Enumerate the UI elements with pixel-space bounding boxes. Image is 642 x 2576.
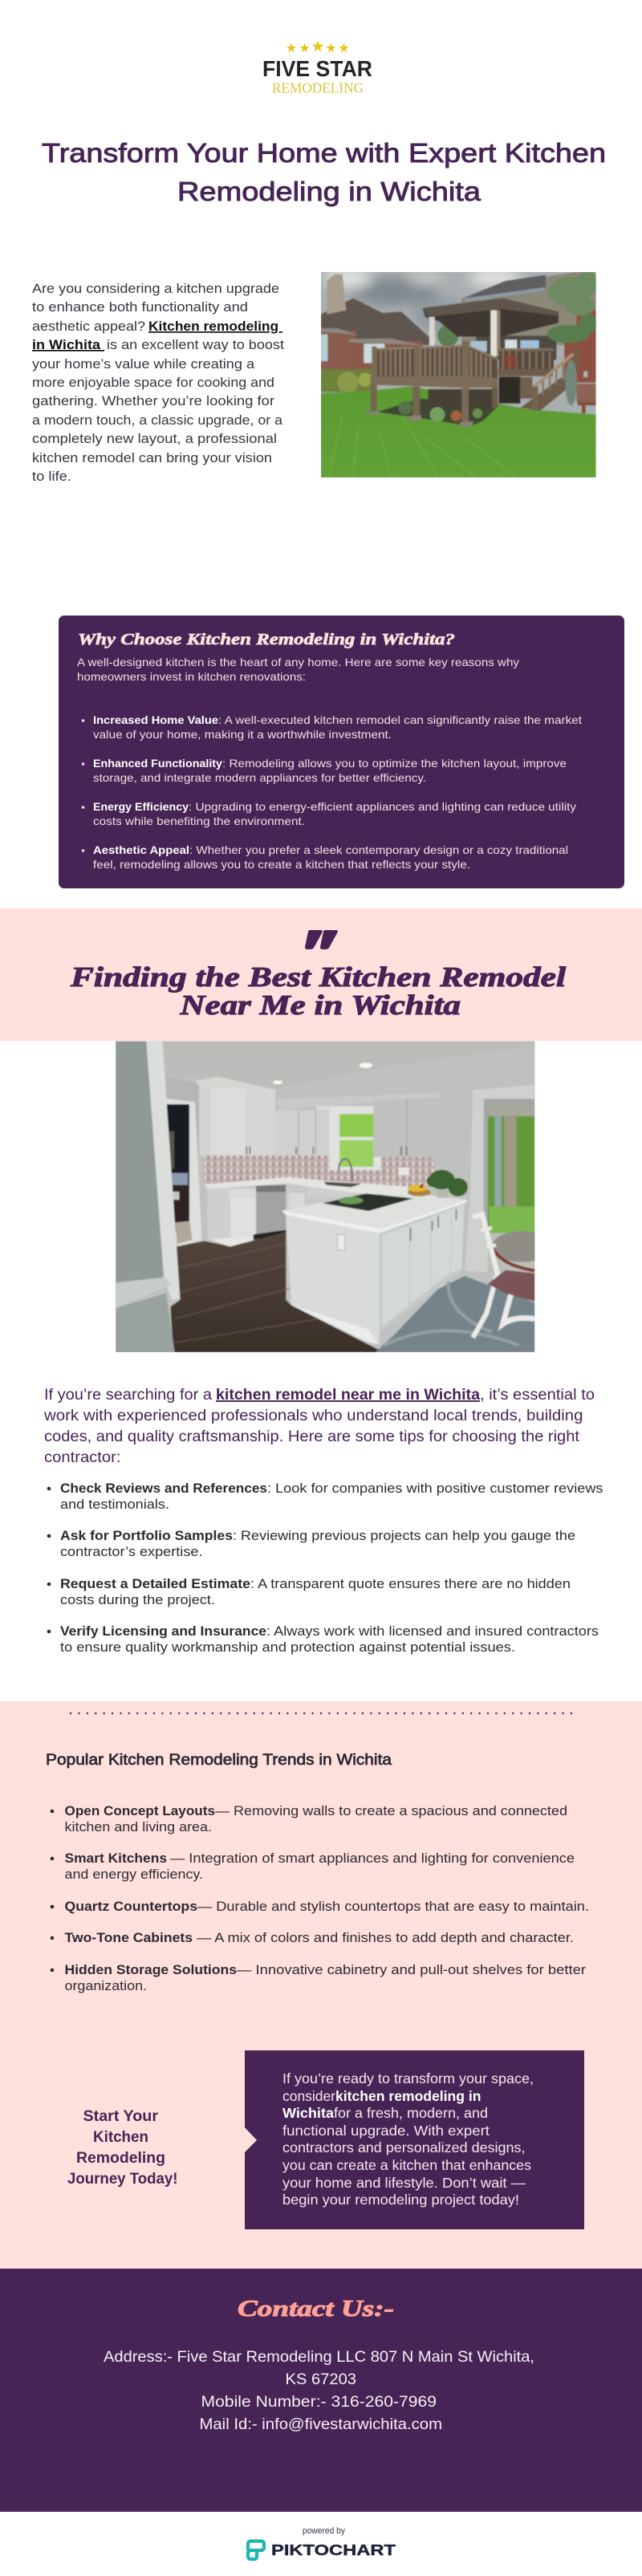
tree right [548, 271, 598, 315]
tip: licensing and insurance: Verify Licensing and Insurance [60, 1624, 266, 1639]
text block: introduction: is an excellent way to boost [107, 337, 284, 352]
logo wordmark: FIVE STAR [262, 56, 372, 81]
tip: detailed estimate: Request a Detailed Estimate [60, 1577, 250, 1591]
callout text: functional upgrade. With expert [282, 2123, 490, 2139]
trend: open concept: — Removing walls to create a spacious and connected [215, 1804, 567, 1818]
banner heading: Finding the Best Kitchen Remodel [70, 961, 566, 993]
callout text: Wichita [282, 2105, 334, 2121]
contact details: Mobile Number:- 316-260-7969 [201, 2393, 437, 2411]
panel: why choose kitchen remodeling [59, 616, 624, 888]
trend: quartz countertops: — Durable and stylish countertops that are easy to maintain. [197, 1899, 589, 1914]
bullet: energy efficiency [82, 800, 576, 827]
bullet: aesthetic appeal: : Whether you prefer a sleek contemporary design or a cozy traditional [189, 843, 568, 856]
peninsula [286, 1214, 380, 1344]
trend: two-tone cabinets: — A mix of colors and finishes to add depth and character. [197, 1931, 574, 1945]
panel heading: Why Choose Kitchen Remodeling in Wichita? [78, 631, 455, 648]
heading: start your kitchen remodeling journey [67, 2107, 178, 2188]
callout text: consider [282, 2088, 335, 2104]
trend: hidden storage [51, 1963, 587, 1993]
callout text: contractors and personalized designs, [282, 2139, 525, 2155]
tip: check reviews: : Look for companies with positive customer reviews [267, 1481, 603, 1496]
panel: contact us [0, 2269, 642, 2512]
trend: smart kitchens: and energy efficiency. [64, 1867, 203, 1882]
trend: hidden storage: — Innovative cabinetry and pull-out shelves for better [237, 1963, 587, 1977]
upper deck rail [498, 368, 553, 376]
doorway [164, 1098, 201, 1246]
lower cabinets [207, 1188, 256, 1238]
pergola [422, 308, 559, 337]
trend: smart kitchens [51, 1851, 575, 1882]
lawn [321, 387, 596, 477]
heading: start your kitchen remodeling journey: Remodeling [76, 2149, 165, 2167]
list: tips for choosing a contractor [47, 1481, 603, 1655]
logo: Five Star Remodeling [262, 40, 372, 96]
bullet: energy efficiency: : Upgrading to energy-efficient appliances and lighting can reduce utility [189, 800, 576, 813]
door trim and left wall [146, 1041, 180, 1300]
text block: searching for a kitchen remodel: codes, and quality craftsmanship. Here are some tips for choosing the right [44, 1428, 580, 1445]
trend: two-tone cabinets: Two-Tone Cabinets [64, 1931, 193, 1945]
text block: introduction: aesthetic appeal? [32, 319, 145, 334]
garden under deck [377, 399, 498, 427]
text block: introduction: more enjoyable space for cooking and [32, 375, 274, 390]
text block: introduction: your home’s value while creating a [32, 356, 255, 372]
window [315, 1106, 329, 1111]
text block: introduction: gathering. Whether you’re looking for [32, 393, 274, 408]
back counter [205, 1177, 408, 1196]
tip: check reviews: Check Reviews and References [60, 1481, 267, 1496]
staircase [499, 376, 520, 404]
heading: start your kitchen remodeling journey: Kitchen [93, 2128, 148, 2146]
callout text: your home and lifestyle. Don’t wait — [282, 2175, 526, 2191]
footer: powered by Piktochart: powered by [303, 2526, 345, 2536]
trend: smart kitchens: Smart Kitchens [64, 1851, 167, 1866]
tip: licensing and insurance: : Always work with licensed and insured contractors [266, 1624, 599, 1639]
callout text [282, 2070, 534, 2208]
trend: open concept [51, 1804, 567, 1834]
bullet: increased home value: : A well-executed kitchen remodel can significantly raise the market [218, 713, 582, 726]
bullet: increased home value: Increased Home Value [93, 713, 218, 726]
tip: licensing and insurance: to ensure quality workmanship and protection against potential issues. [60, 1640, 515, 1655]
sky clouds [323, 267, 522, 331]
footer: powered by Piktochart [248, 2526, 396, 2559]
bullet: aesthetic appeal: Aesthetic Appeal [93, 843, 189, 856]
trend: hidden storage: organization. [64, 1979, 147, 1993]
tip: portfolio samples: contractor’s expertise. [60, 1545, 202, 1559]
title: Remodeling in Wichita [177, 177, 481, 207]
deck posts [371, 384, 377, 412]
left house [321, 299, 436, 345]
callout text: for a fresh, modern, and [334, 2105, 488, 2121]
bullet: energy efficiency: costs while benefiting the environment. [93, 815, 305, 827]
cooktop [323, 1193, 413, 1211]
bullet: aesthetic appeal: feel, remodeling allows you to create a kitchen that reflects your style. [93, 858, 470, 871]
bullet: enhanced functionality [82, 757, 567, 784]
panel: finding the best kitchen remodel banner [0, 908, 642, 1041]
heading: start your kitchen remodeling journey: Journey Today! [67, 2170, 178, 2188]
text block: introduction: a modern touch, a classic upgrade, or a [32, 412, 283, 428]
Piktochart wordmark: PIKTOCHART [271, 2541, 396, 2558]
faucet [339, 1159, 352, 1181]
floor [171, 1232, 384, 1352]
upper cabinets [199, 1087, 249, 1156]
deck railing infill [373, 345, 498, 379]
text block: introduction: completely new layout, a professional [32, 431, 277, 446]
rug [376, 1276, 534, 1352]
backsplash [203, 1156, 329, 1184]
photo: house with wooden deck and lawn [320, 267, 598, 477]
tree behind [437, 325, 459, 347]
plant and fruit bowl [408, 1188, 431, 1197]
contact details [104, 2348, 534, 2433]
icon: five gold stars [286, 40, 349, 52]
trend: hidden storage: Hidden Storage Solutions [64, 1963, 237, 1977]
trend: open concept: Open Concept Layouts [64, 1804, 215, 1818]
text block: introduction: Are you considering a kitchen upgrade [32, 281, 279, 296]
callout text: you can create a kitchen that enhances [282, 2157, 531, 2173]
tip: check reviews [47, 1481, 603, 1512]
bullet: increased home value: value of your home, making it a worthwhile investment. [93, 728, 392, 741]
text block: introduction: to life. [32, 469, 71, 484]
trend: smart kitchens: — Integration of smart appliances and lighting for convenience [170, 1851, 575, 1866]
text block: searching for a kitchen remodel: , it’s essential to [480, 1387, 595, 1404]
text block: introduction: Kitchen remodeling [148, 319, 282, 334]
icon: quotation mark [305, 930, 338, 949]
text block: introduction [32, 281, 284, 484]
tip: detailed estimate: costs during the project. [60, 1593, 215, 1607]
banner heading [70, 961, 566, 1021]
table and chair [492, 1231, 551, 1262]
contact details: Address:- Five Star Remodeling LLC 807 N Main St Wichita, [104, 2348, 534, 2366]
contact details: KS 67203 [286, 2371, 356, 2388]
contact details: Mail Id:- info@fivestarwichita.com [199, 2416, 442, 2433]
panel: pink trends background [0, 1701, 642, 2269]
logo tagline: REMODELING [272, 80, 364, 96]
trend: quartz countertops: Quartz Countertops [64, 1899, 197, 1914]
photo: remodeled white kitchen [116, 1041, 551, 1352]
text block: introduction: to enhance both functionality and [32, 299, 248, 315]
banner heading: Near Me in Wichita [179, 989, 461, 1021]
bullet: aesthetic appeal [82, 843, 568, 871]
bullet: enhanced functionality: Enhanced Functionality [93, 757, 222, 770]
contact heading: Contact Us:- [238, 2296, 394, 2322]
callout text: begin your remodeling project today! [282, 2192, 519, 2208]
text block: searching for a kitchen remodel: kitchen remodel near me in Wichita [216, 1387, 480, 1404]
heading: popular trends: Popular Kitchen Remodeling Trends in Wichita [46, 1752, 392, 1769]
text block: searching for a kitchen remodel: work with experienced professionals who understand local trends, building [43, 1408, 583, 1424]
text block: searching for a kitchen remodel: contractor: [44, 1449, 120, 1466]
trend: open concept: kitchen and living area. [64, 1820, 212, 1834]
panel intro text: homeowners invest in kitchen renovations: [77, 670, 306, 683]
panel intro text [77, 656, 519, 683]
text block: introduction: kitchen remodel can bring your vision [32, 450, 272, 465]
bullet: enhanced functionality: storage, and integrate modern appliances for better efficiency. [93, 771, 426, 784]
text block: searching for a kitchen remodel [43, 1387, 595, 1466]
deck body [371, 376, 498, 388]
title [42, 139, 606, 207]
tip: licensing and insurance [47, 1624, 599, 1655]
text block: searching for a kitchen remodel: If you’re searching for a [44, 1387, 212, 1404]
callout: call to action box [245, 2050, 584, 2229]
text block: introduction: in Wichita [32, 337, 104, 352]
bench [576, 384, 596, 402]
callout text: If you’re ready to transform your space, [282, 2070, 534, 2086]
right house [461, 272, 596, 345]
callout text: kitchen remodeling in [335, 2088, 482, 2104]
list: kitchen remodeling trends [51, 1804, 589, 1993]
icon: Piktochart logo mark [248, 2541, 264, 2559]
tip: detailed estimate [47, 1577, 571, 1607]
tip: portfolio samples: : Reviewing previous projects can help you gauge the [233, 1529, 575, 1543]
tip: portfolio samples: Ask for Portfolio Samples [60, 1529, 233, 1543]
heading: start your kitchen remodeling journey: Start Your [83, 2107, 158, 2125]
ceiling and wall [534, 1042, 535, 1046]
panel intro text: A well-designed kitchen is the heart of any home. Here are some key reasons why [77, 656, 519, 668]
title: Transform Your Home with Expert Kitchen [42, 139, 606, 169]
bullet: energy efficiency: Energy Efficiency [93, 800, 189, 813]
trend: two-tone cabinets [51, 1931, 574, 1945]
bullet: increased home value [82, 713, 582, 741]
sliding door [465, 1085, 534, 1276]
bullet: enhanced functionality: : Remodeling allows you to optimize the kitchen layout, improve [222, 757, 567, 770]
tip: check reviews: and testimonials. [60, 1497, 169, 1512]
tip: detailed estimate: : A transparent quote ensures there are no hidden [250, 1577, 571, 1591]
trend: quartz countertops [51, 1899, 589, 1914]
tip: portfolio samples [47, 1529, 575, 1559]
